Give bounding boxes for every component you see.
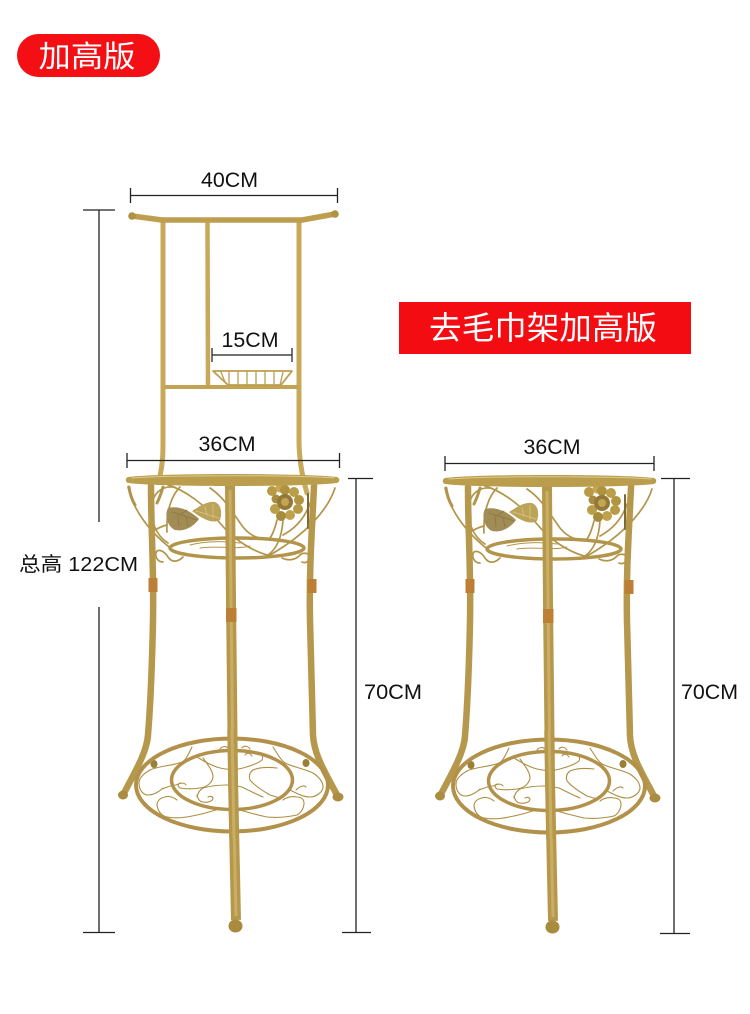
soap basket — [213, 371, 292, 385]
dimension: 36CM left — [127, 433, 340, 468]
plant stand right — [435, 475, 660, 934]
dimension: 70CM left: 70CM — [364, 681, 422, 704]
plant stand left — [118, 474, 344, 932]
dimension: total height 122CM: 总高 122CM — [19, 553, 138, 576]
heading banner: 去毛巾架加高版 — [399, 302, 691, 354]
dimension: 36CM right: 36CM — [524, 436, 580, 459]
dimension: 70CM right — [660, 478, 738, 934]
dimension: 36CM right — [445, 436, 654, 471]
dimension: 70CM right: 70CM — [681, 681, 738, 704]
badge: 加高版 — [17, 34, 160, 77]
dimension: 40CM width — [130, 169, 338, 203]
dimension: 70CM left — [342, 478, 422, 932]
dimension: total height 122CM — [19, 210, 138, 932]
heading banner: 去毛巾架加高版: 去毛巾架加高版 — [429, 310, 657, 346]
badge: 加高版: 加高版 — [38, 41, 136, 74]
dimension: 40CM width: 40CM — [201, 169, 258, 192]
towel rack frame — [128, 210, 339, 493]
dimension: 15CM basket: 15CM — [222, 329, 278, 352]
dimension: 36CM left: 36CM — [198, 433, 256, 456]
dimension: 15CM basket — [212, 329, 292, 362]
